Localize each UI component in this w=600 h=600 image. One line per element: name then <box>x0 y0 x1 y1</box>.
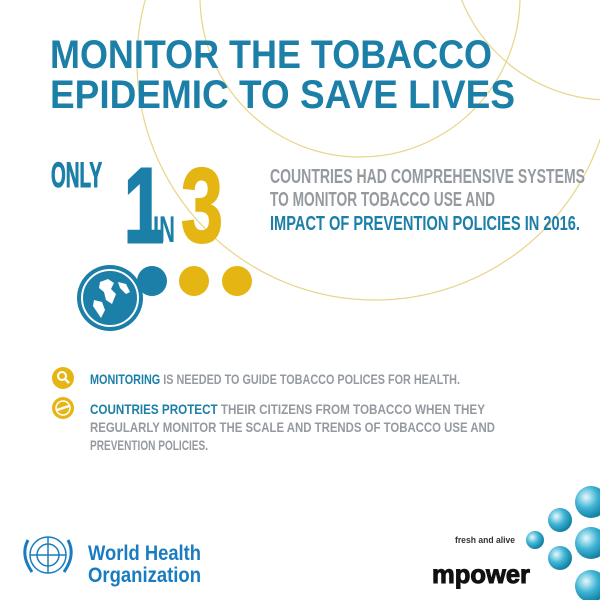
WHO logo: World Health <box>88 542 201 565</box>
title: MONITOR THE TOBACCO <box>50 33 492 77</box>
bullet 2: PREVENTION POLICIES. <box>90 437 208 453</box>
bullet 2: REGULARLY MONITOR THE SCALE AND TRENDS OF TOBACCO USE AND <box>90 419 495 435</box>
statistic: only 1 in 3 <box>51 147 223 265</box>
bullet 2: COUNTRIES PROTECT THEIR CITIZENS FROM TOBACCO WHEN THEY <box>90 401 486 417</box>
statistic description <box>270 166 585 235</box>
icon: globe and dots <box>77 265 252 331</box>
mpower logo <box>432 486 600 600</box>
statistic: only 1 in 3: ONLY <box>51 156 102 195</box>
statistic: only 1 in 3: 1 <box>124 147 164 265</box>
title: EPIDEMIC TO SAVE LIVES <box>50 73 515 117</box>
bullet 1: MONITORING IS NEEDED TO GUIDE TOBACCO POLICES FOR HEALTH. <box>90 371 460 387</box>
WHO logo <box>25 537 201 587</box>
bullet 2 <box>52 397 495 453</box>
statistic description: TO MONITOR TOBACCO USE AND <box>270 189 495 211</box>
bullet 1 <box>52 367 460 389</box>
WHO logo: Organization <box>88 564 201 587</box>
statistic: only 1 in 3: IN <box>153 209 175 250</box>
mpower logo: fresh and alive <box>455 535 515 545</box>
statistic: only 1 in 3: 3 <box>181 147 223 265</box>
mpower logo: mpower <box>432 559 530 589</box>
title <box>50 33 515 117</box>
